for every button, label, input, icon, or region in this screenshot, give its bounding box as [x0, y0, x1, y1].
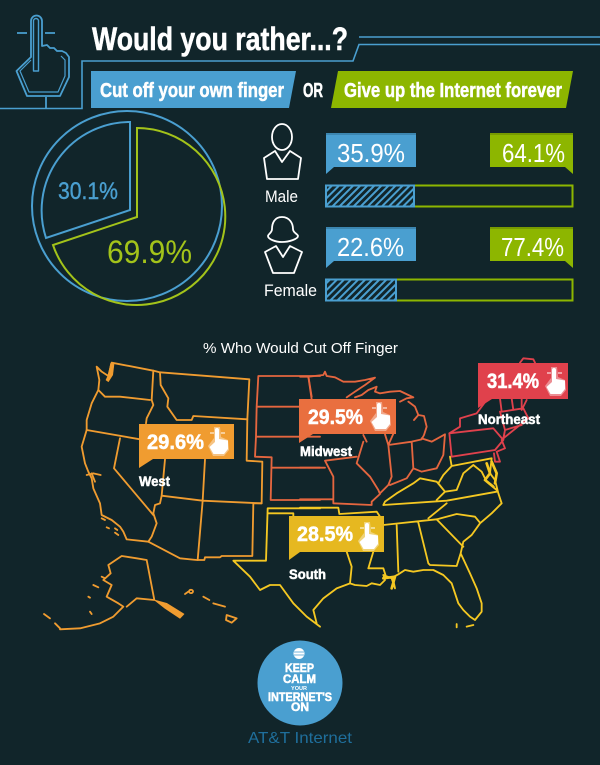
map region: west: [44, 363, 262, 629]
option banner: give up internet: Give up the Internet forever: [344, 80, 562, 102]
male statistics: [326, 133, 573, 206]
midwest callout: 29.5%: [308, 406, 363, 429]
keep calm badge: CALM: [283, 674, 316, 686]
south callout: [289, 516, 384, 560]
pie value green: 69.9%: [107, 234, 192, 270]
keep calm badge: INTERNET'S: [268, 692, 332, 704]
keep calm badge: [258, 640, 342, 726]
female green callout: 77.4%: [501, 232, 564, 262]
midwest label: Midwest: [300, 443, 352, 459]
map of the United States: [44, 358, 535, 629]
map region: midwest: [255, 376, 320, 500]
male blue callout: [326, 133, 416, 174]
option banner: cut off finger: Cut off your own finger: [100, 80, 284, 102]
icon: west hand: [208, 427, 229, 456]
female bar: [326, 280, 572, 300]
male green callout: 64.1%: [502, 138, 565, 168]
female green callout: [490, 227, 573, 268]
male green callout: [490, 133, 573, 174]
keep calm badge: KEEP: [285, 663, 314, 675]
map region: midwest east: [300, 372, 445, 505]
male blue callout: 35.9%: [337, 138, 405, 168]
northeast callout: 31.4%: [487, 370, 539, 393]
blue slice: [42, 122, 130, 238]
female blue callout: [326, 227, 416, 268]
header connector lines: [0, 37, 600, 108]
map region: south: [233, 508, 320, 627]
icon: pointing hand: [16, 16, 69, 108]
icon: male: [264, 124, 301, 179]
icon: midwest hand: [370, 402, 391, 431]
map title: % Who Would Cut Off Finger: [203, 341, 398, 357]
male label: Male: [265, 187, 298, 206]
female statistics: [326, 227, 573, 300]
option banner: cut off finger: [91, 71, 296, 108]
or label: OR: [303, 80, 323, 102]
male bar: [326, 186, 572, 206]
option banner: give up internet: [331, 71, 573, 108]
icon: south hand: [358, 522, 379, 551]
icon: female: [265, 217, 302, 273]
map region: northeast: [449, 358, 535, 462]
northeast callout: [478, 363, 568, 408]
green slice: [53, 128, 225, 305]
west callout: 29.6%: [147, 431, 204, 454]
west callout: [139, 424, 234, 468]
female label: Female: [264, 281, 317, 300]
midwest callout: [299, 399, 396, 443]
south label: South: [289, 566, 326, 582]
pie chart: [32, 111, 225, 305]
icon: globe logo: [294, 648, 304, 659]
northeast label: Northeast: [478, 411, 540, 427]
west label: West: [139, 473, 170, 489]
icon: northeast hand: [545, 367, 566, 396]
map region: south east: [300, 457, 502, 627]
keep calm badge: YOUR: [291, 686, 307, 692]
keep calm badge: ON: [291, 702, 309, 714]
brand name: AT&T Internet: [248, 730, 353, 747]
south callout: 28.5%: [297, 523, 353, 546]
female blue callout: 22.6%: [337, 232, 404, 262]
pie value blue: 30.1%: [58, 178, 118, 205]
title: Would you rather...?: [92, 21, 348, 57]
